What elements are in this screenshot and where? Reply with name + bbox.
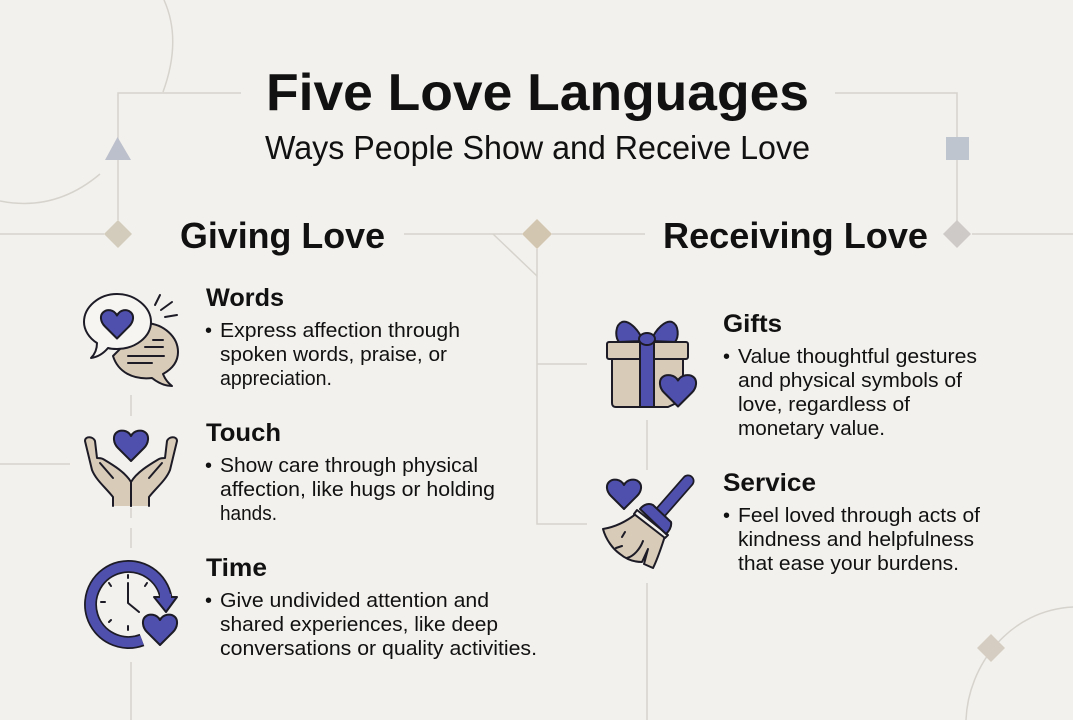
- text: touch description: affection, like hugs or holding: [220, 479, 495, 501]
- heading: words: Words: [206, 284, 284, 312]
- icon: clock with arrow and heart: [91, 566, 177, 645]
- icon: triangle marker: [105, 137, 131, 160]
- item: words: [84, 284, 460, 390]
- heading: time: Time: [206, 554, 267, 582]
- icon: broom with heart: [603, 480, 688, 568]
- text: words description: appreciation.: [220, 368, 332, 390]
- text: touch description: hands.: [220, 503, 277, 525]
- text: touch description: [205, 455, 495, 525]
- text: touch description: •: [205, 455, 212, 477]
- text: words description: Express affection through: [220, 320, 460, 342]
- title: Five Love Languages: [266, 64, 809, 122]
- subtitle: Ways People Show and Receive Love: [265, 129, 810, 166]
- text: gifts description: love, regardless of: [738, 394, 910, 416]
- text: service description: that ease your burdens.: [738, 553, 959, 575]
- icon: left diamond marker: [104, 220, 132, 248]
- text: gifts description: monetary value.: [738, 418, 885, 440]
- item: touch: [85, 419, 495, 525]
- text: service description: •: [723, 505, 730, 527]
- text: gifts description: Value thoughtful gestures: [738, 346, 977, 368]
- text: words description: spoken words, praise, or: [220, 344, 447, 366]
- text: time description: [205, 590, 537, 660]
- text: service description: Feel loved through acts of: [738, 505, 980, 527]
- item: gifts: [607, 310, 977, 440]
- text: service description: kindness and helpfulness: [738, 529, 974, 551]
- text: service description: [723, 505, 980, 575]
- panel: receiving love: [603, 215, 980, 575]
- item: service: [603, 469, 980, 575]
- text: time description: •: [205, 590, 212, 612]
- text: time description: Give undivided attention and: [220, 590, 489, 612]
- text: gifts description: and physical symbols of: [738, 370, 962, 392]
- icon: center diamond marker: [522, 219, 552, 249]
- text: gifts description: •: [723, 346, 730, 368]
- icon: open hands with heart: [85, 431, 177, 506]
- heading: giving love: Giving Love: [180, 215, 385, 256]
- icon: gift box with heart: [607, 322, 696, 407]
- icon: right diamond marker: [943, 220, 971, 248]
- icon: speech bubbles with heart: [84, 294, 178, 386]
- heading: gifts: Gifts: [723, 310, 782, 338]
- heading: service: Service: [723, 469, 816, 497]
- text: gifts description: [723, 346, 977, 440]
- text: time description: conversations or quality activities.: [220, 638, 537, 660]
- text: words description: [205, 320, 460, 390]
- item: time: [91, 554, 537, 660]
- text: touch description: Show care through physical: [220, 455, 478, 477]
- text: time description: shared experiences, like deep: [220, 614, 498, 636]
- text: words description: •: [205, 320, 212, 342]
- icon: square marker: [946, 137, 969, 160]
- panel: giving love: [84, 215, 537, 660]
- heading: receiving love: Receiving Love: [663, 215, 928, 256]
- heading: touch: Touch: [206, 419, 281, 447]
- icon: bottom diamond marker: [977, 634, 1005, 662]
